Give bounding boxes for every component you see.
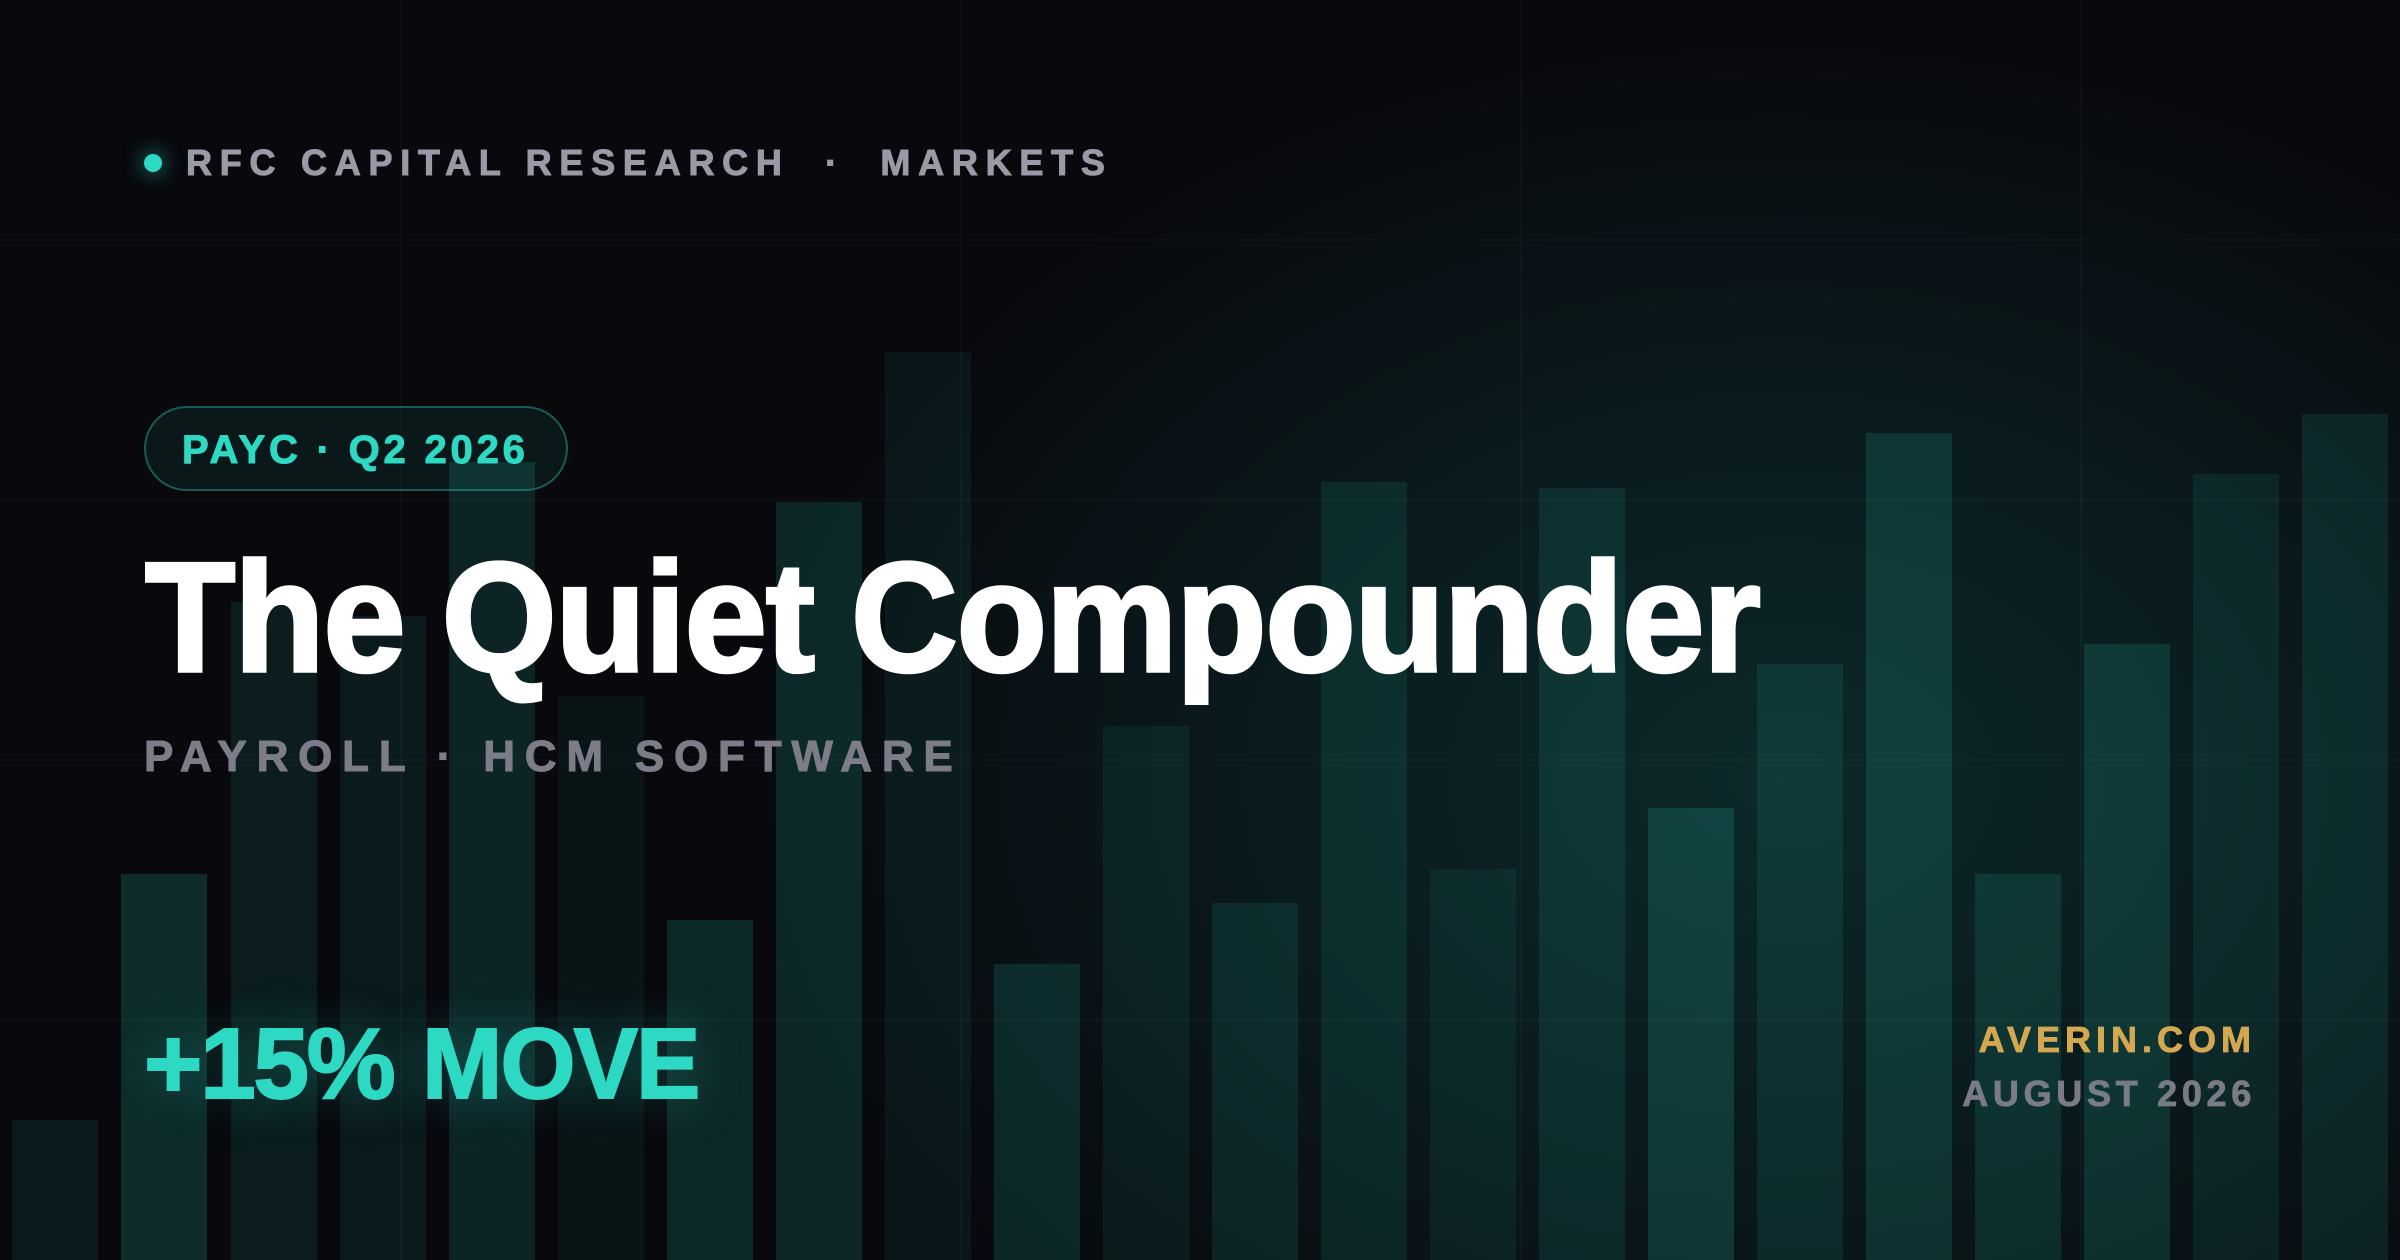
icon: status dot bbox=[144, 154, 162, 172]
stock move callout bbox=[144, 1008, 700, 1120]
title: The Quiet Compounder bbox=[145, 531, 1760, 705]
stock move callout: +15% bbox=[144, 1008, 393, 1120]
eyebrow: firm and section: RFC CAPITAL RESEARCH · MARKETS bbox=[186, 142, 1113, 183]
publication date: AUGUST 2026 bbox=[1962, 1073, 2256, 1114]
ticker pill bbox=[144, 406, 568, 491]
subtitle: PAYROLL · HCM SOFTWARE bbox=[144, 732, 963, 781]
stock move callout: MOVE bbox=[422, 1008, 698, 1120]
source site: AVERIN.COM bbox=[1979, 1019, 2256, 1060]
ticker pill label: PAYC · Q2 2026 bbox=[182, 428, 529, 472]
